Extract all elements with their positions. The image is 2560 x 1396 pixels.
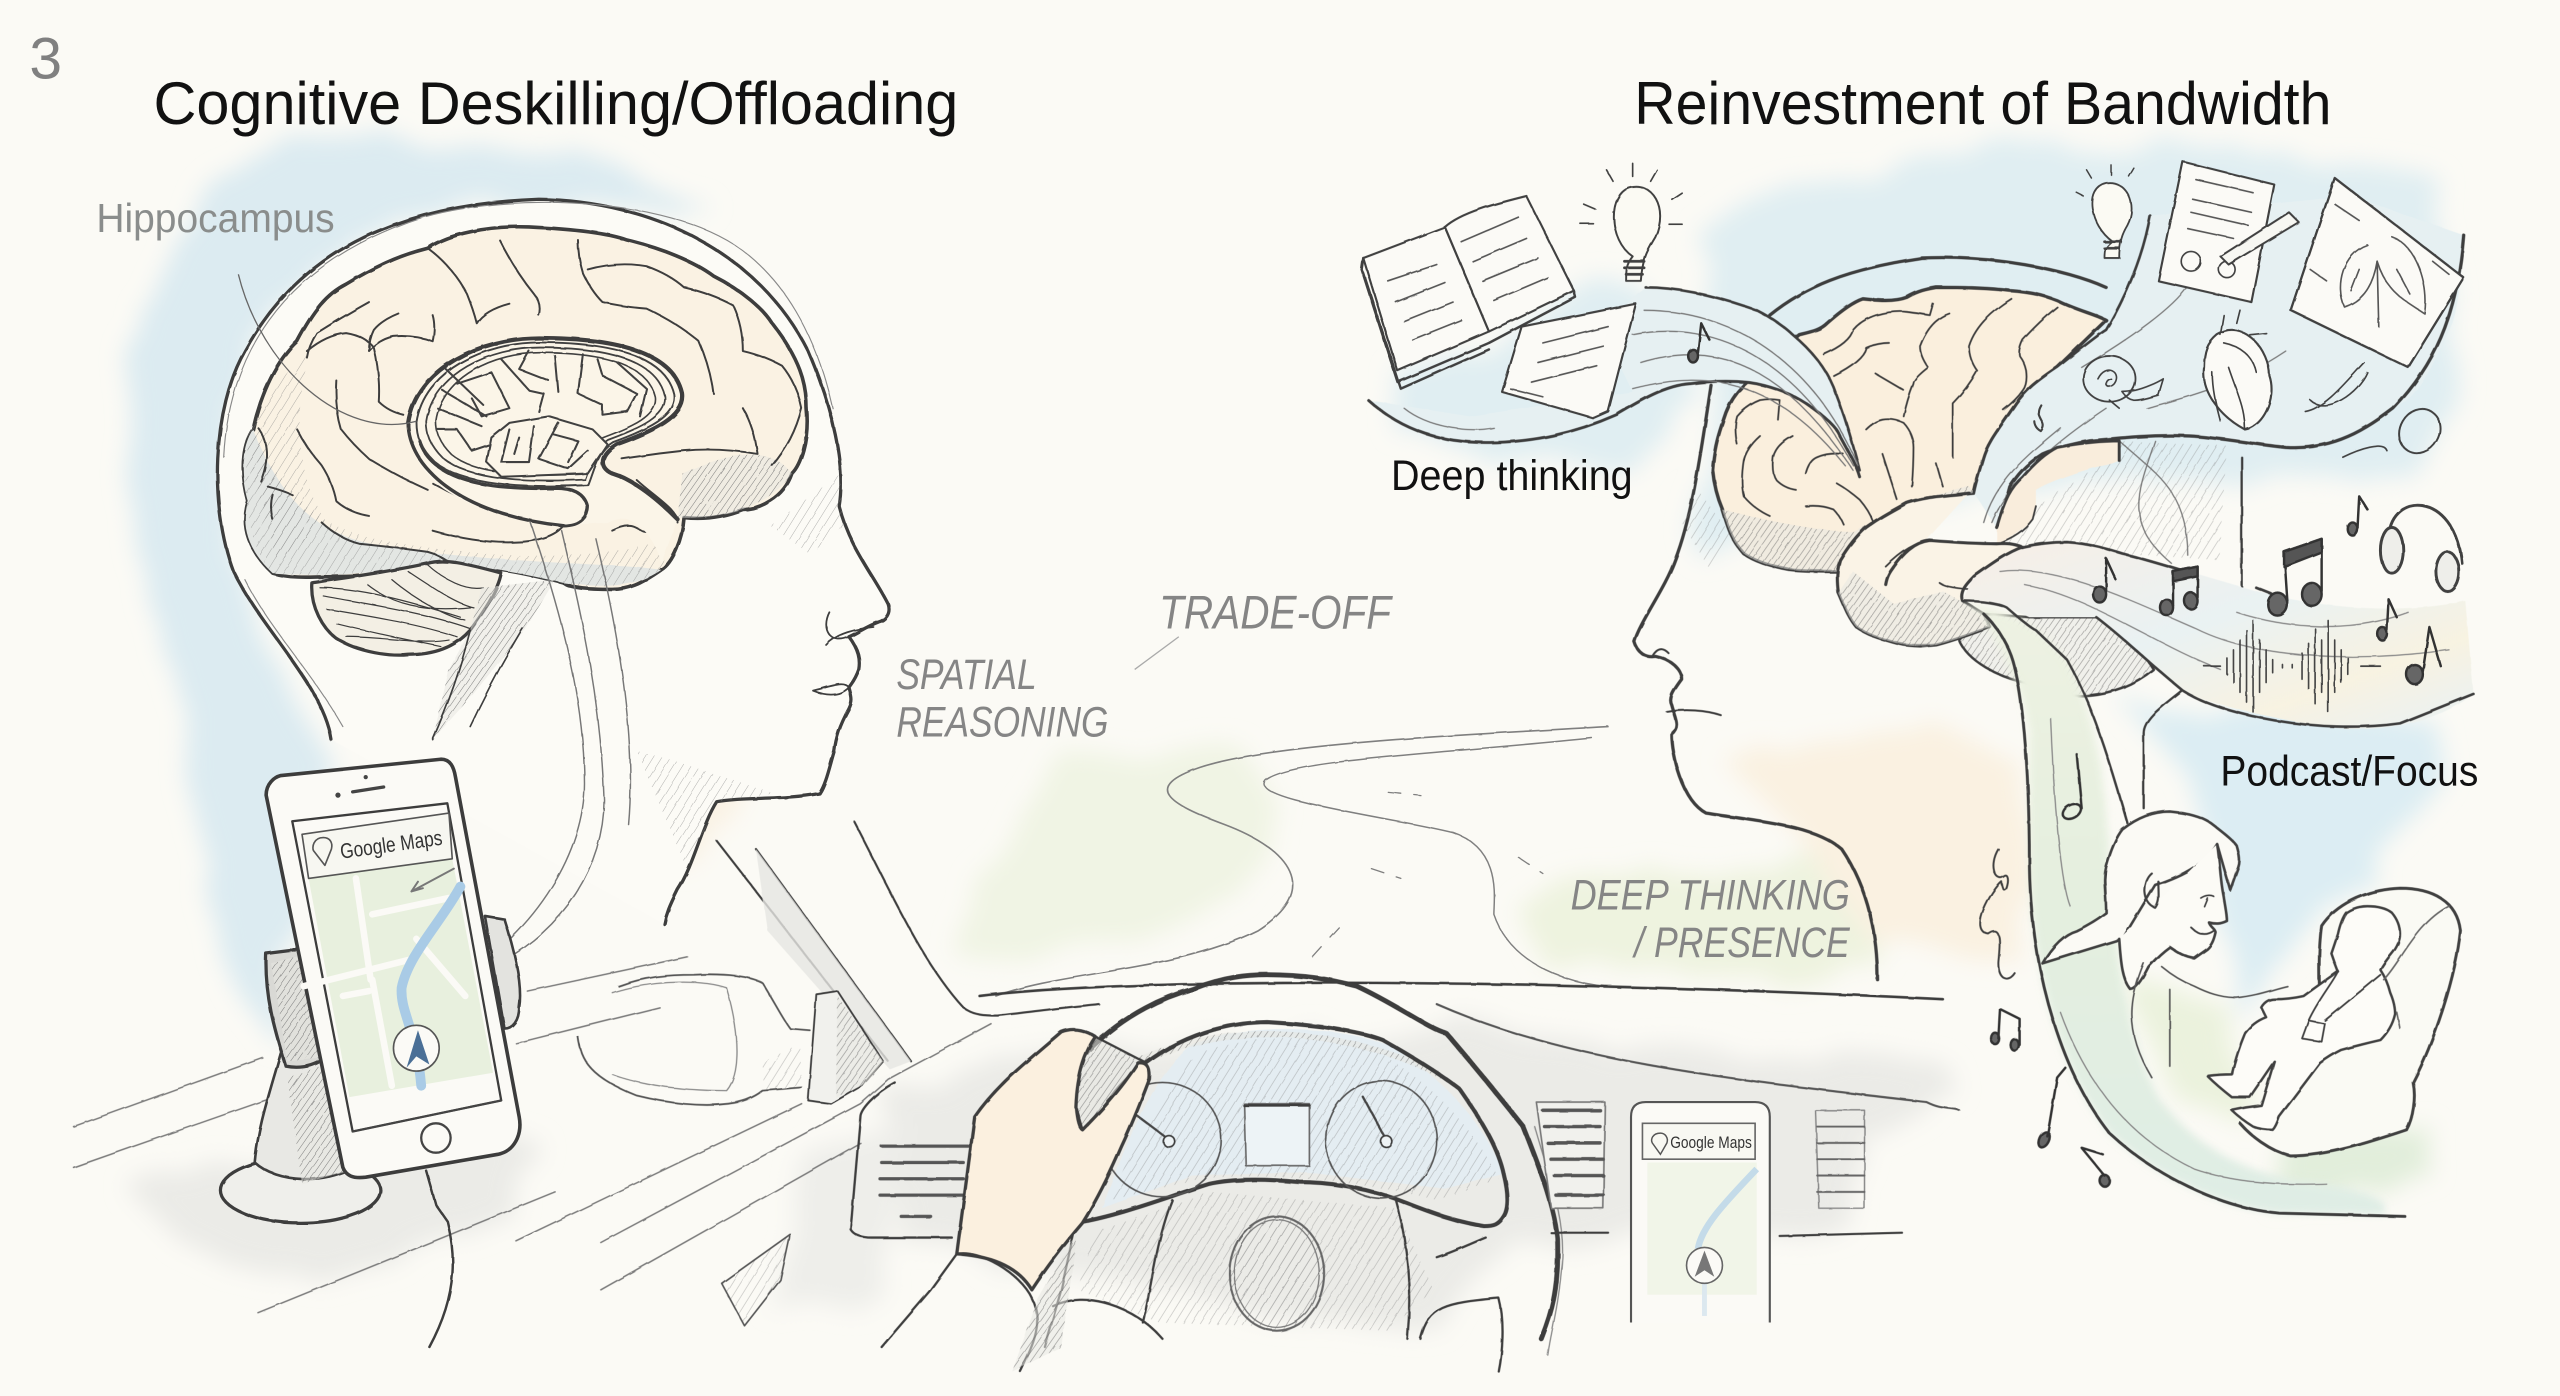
steering wheel bbox=[1045, 975, 1563, 1371]
right brain gyri bbox=[1736, 299, 2057, 524]
head and face profile bbox=[217, 199, 889, 924]
lower flowing stream bbox=[1962, 601, 2405, 1216]
phone on suction mount bbox=[220, 759, 520, 1347]
left flowing ribbon bbox=[1368, 287, 1860, 477]
left air vent bbox=[851, 1082, 952, 1238]
navigation arrow bbox=[1687, 1247, 1722, 1283]
windshield pillar bbox=[717, 821, 1099, 1061]
music ribbon bbox=[1962, 542, 2473, 729]
map pin icon bbox=[313, 838, 332, 865]
right brain bbox=[1713, 287, 2106, 571]
map pin icon bbox=[1652, 1133, 1667, 1154]
phone body bbox=[266, 759, 520, 1178]
music notes bbox=[1688, 323, 2441, 1186]
hippocampus maze bbox=[408, 338, 683, 563]
mount base and arm bbox=[220, 916, 520, 1347]
right side icons bbox=[1362, 162, 2464, 1186]
label: Google Maps bbox=[1670, 1134, 1752, 1152]
brain outline bbox=[243, 227, 807, 589]
light bulb with rays bbox=[1580, 163, 1682, 281]
baby in car seat bbox=[2207, 888, 2460, 1156]
door handle bbox=[722, 1234, 790, 1326]
right upper ribbon bbox=[1974, 196, 2464, 527]
trade-off tick bbox=[1135, 637, 1179, 669]
label: spatial reasoning: REASONING bbox=[896, 698, 1109, 745]
driver hand bbox=[882, 1030, 1150, 1371]
second bulb bbox=[2077, 165, 2134, 258]
panel: reinvestment head bbox=[1368, 196, 2473, 1216]
steering hub bbox=[1229, 1216, 1324, 1331]
page of notes bbox=[1502, 304, 1636, 418]
squiggle ribbon line bbox=[1980, 849, 2015, 979]
small brain and DNA doodles bbox=[2034, 356, 2448, 461]
mother figure bbox=[2042, 811, 2287, 1078]
title: reinvestment: Reinvestment of Bandwidth bbox=[1634, 69, 2331, 137]
map arrow bbox=[411, 869, 454, 891]
research paper and pencil bbox=[2158, 162, 2299, 302]
lung diagram sheet bbox=[2291, 178, 2464, 367]
dashboard phone with Google Maps bbox=[1631, 1102, 1770, 1322]
neck shading bbox=[637, 751, 774, 865]
title: cognitive deskilling: Cognitive Deskilling/Offloading bbox=[153, 69, 958, 137]
screen map bbox=[292, 803, 501, 1131]
road winding to the horizon bbox=[996, 727, 1633, 996]
label: deep thinking presence: / PRESENCE bbox=[1632, 919, 1850, 966]
route line bbox=[402, 887, 460, 1086]
watercolor washes bbox=[126, 141, 2465, 1331]
navigation marker bbox=[393, 1025, 439, 1071]
nose and lips detail bbox=[813, 612, 873, 695]
car interior bbox=[73, 821, 1959, 1371]
side mirror bbox=[578, 974, 810, 1105]
leader line: hippocampus bbox=[238, 274, 416, 424]
page number: 3 bbox=[29, 26, 62, 91]
label: Google Maps: Google Maps bbox=[339, 827, 444, 864]
label: podcast focus: Podcast/Focus bbox=[2220, 747, 2478, 794]
hatched occipital area bbox=[2000, 441, 2227, 560]
dashboard lines bbox=[980, 983, 1943, 999]
sound waveform bbox=[2204, 620, 2380, 712]
label: spatial reasoning: SPATIAL bbox=[896, 651, 1037, 698]
app header bbox=[302, 813, 452, 878]
brain gyri bbox=[258, 240, 802, 565]
neural fibres from brain bbox=[457, 522, 630, 980]
brain shading bbox=[243, 429, 661, 586]
anatomical heart bbox=[2204, 310, 2272, 429]
label: deep thinking presence: DEEP THINKING bbox=[1571, 871, 1850, 918]
right air vents bbox=[1536, 1102, 1902, 1236]
skull arc and face profile bbox=[1770, 258, 2106, 315]
sketch echo line of head bbox=[224, 202, 833, 727]
lower brain fold bbox=[1837, 493, 2023, 646]
right cerebellum bbox=[1959, 614, 2153, 696]
label: hippocampus: Hippocampus bbox=[96, 195, 335, 241]
brow shadow bbox=[771, 474, 842, 555]
gauges bbox=[1104, 1082, 1221, 1197]
headphones bbox=[2380, 505, 2462, 591]
open book bbox=[1362, 196, 1576, 389]
label: trade-off: TRADE-OFF bbox=[1159, 587, 1394, 640]
panel: cognitive deskilling head bbox=[217, 199, 889, 980]
label: deep thinking: Deep thinking bbox=[1391, 452, 1633, 499]
back of neck line bbox=[2144, 457, 2242, 808]
cerebellum bbox=[312, 561, 501, 655]
temporal lobe bbox=[1997, 441, 2119, 544]
phone details bbox=[353, 787, 384, 792]
